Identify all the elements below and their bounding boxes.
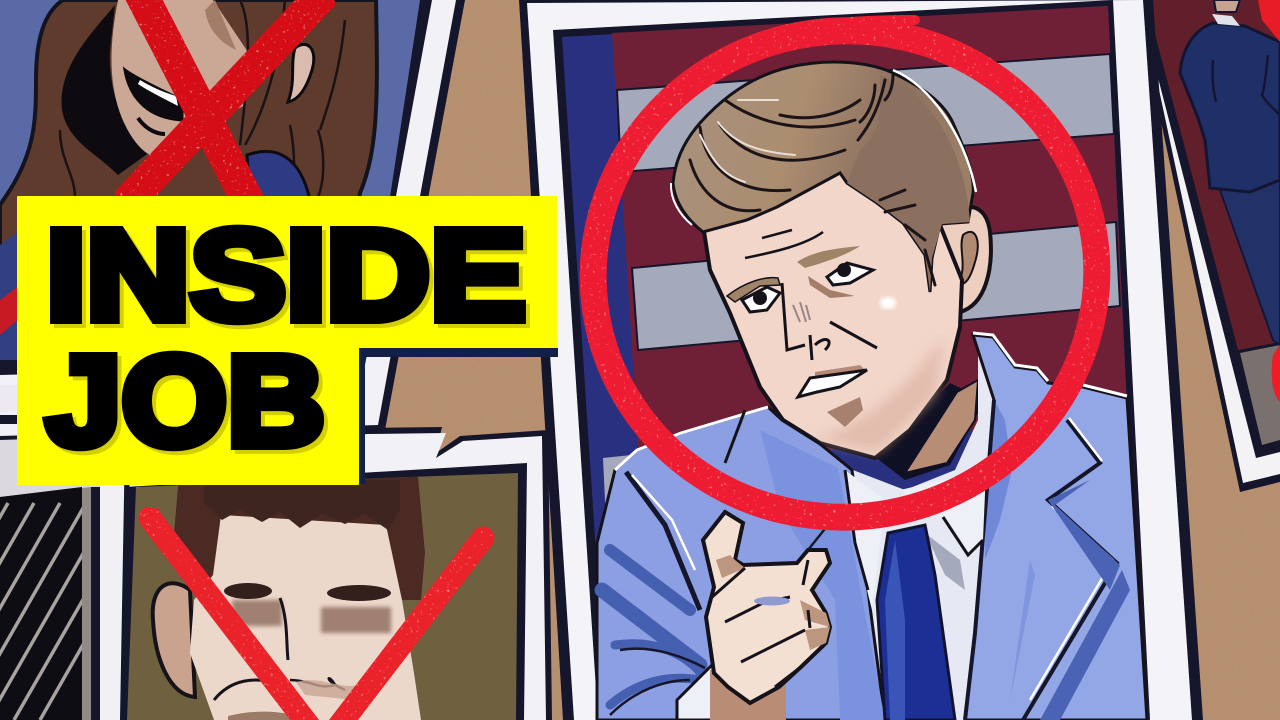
panel: kennedy photo (519, 0, 1203, 720)
eyes (742, 263, 873, 312)
title line 1 shadow: INSIDE (50, 208, 530, 351)
hair (174, 476, 425, 600)
lower left fragment: white band (0, 385, 20, 412)
red circle (562, 0, 1128, 550)
suit: right side (965, 335, 1147, 720)
panel: right photo navy suit (1135, 0, 1280, 492)
lower left fragment: red band (0, 288, 17, 335)
hair strands light (700, 100, 795, 182)
figure: trousers (1220, 175, 1280, 345)
lower left fragment: navy (0, 232, 17, 300)
flag: grey bottom stripe (603, 452, 660, 520)
grey floor (1240, 345, 1280, 445)
ear (288, 44, 314, 102)
hair white outline (893, 70, 976, 192)
blue backdrop (0, 0, 420, 202)
figure: collar (1212, 14, 1240, 26)
suit: lapel shade (1048, 480, 1120, 590)
forearm (710, 660, 786, 720)
panel: man photo with red cross (120, 427, 552, 720)
suit: lapel lines (626, 410, 832, 610)
mouth (798, 370, 867, 397)
mouth (228, 712, 290, 720)
chin shade (827, 397, 863, 427)
suit: inner shade (985, 400, 1012, 560)
nose (214, 598, 345, 700)
hair strands dark (690, 75, 935, 285)
flag: grey lower stripe (632, 222, 1120, 350)
suit: lapel (1023, 420, 1117, 720)
shirt shadow (925, 533, 965, 590)
black hair streaks (62, 5, 150, 175)
flag: maroon (612, 6, 1127, 475)
title line 2 shadow: JOB (50, 334, 329, 477)
tie (877, 525, 955, 720)
teeth (138, 80, 178, 106)
face (703, 150, 962, 458)
face (190, 515, 421, 720)
frame outer line (519, 0, 1203, 720)
face (112, 0, 250, 155)
jagged fringe (204, 480, 400, 530)
red x (125, 0, 325, 205)
title line 1: INSIDE (46, 204, 526, 347)
yellow box (18, 197, 556, 484)
flag: grey top stripe (617, 54, 1114, 172)
figure: jacket (1180, 23, 1280, 192)
finger lines (711, 560, 810, 687)
frame white (527, 0, 1192, 720)
suit: collar white line (973, 333, 1127, 396)
brows (224, 583, 391, 601)
blue top (247, 151, 310, 200)
jaw shade (800, 335, 945, 452)
cheek highlights (880, 297, 896, 309)
hand pointing (703, 512, 830, 703)
figure: neck (1214, 0, 1240, 12)
neck: dark shadow (875, 383, 985, 480)
hair dark side (847, 75, 970, 292)
red cross (150, 518, 483, 720)
shirt (840, 340, 1000, 720)
upper lip (815, 365, 865, 382)
nose (782, 283, 877, 360)
ear (153, 583, 195, 697)
suit: center band (760, 430, 885, 720)
brows (797, 246, 860, 268)
red marks (1258, 0, 1280, 42)
nose shadow (296, 680, 358, 700)
title line 2: JOB (46, 330, 325, 473)
hand shadows (716, 555, 830, 650)
panel: lower left striped photo (0, 436, 130, 720)
cuff (677, 663, 725, 720)
flag: canton (562, 6, 1142, 720)
suit: shoulder white line (615, 407, 768, 470)
shirt divider line (965, 400, 994, 720)
title box: inside job (18, 197, 558, 484)
hair (0, 0, 377, 370)
maroon backdrop (1146, 0, 1280, 350)
photo inner line (553, 0, 1150, 720)
box shadow (358, 348, 558, 484)
hair (673, 62, 973, 292)
brown under-eye bands (232, 600, 391, 633)
eye shade (808, 276, 855, 298)
suit: sleeve folds (602, 550, 700, 705)
hair strands (60, 0, 345, 197)
panel: woman photo crossed out (0, 0, 465, 442)
nose hatch (793, 302, 810, 322)
shirt front right (935, 533, 983, 720)
mouth (125, 70, 182, 120)
eye shadow (205, 0, 236, 50)
neck: brown (905, 380, 978, 473)
forehead lines (745, 230, 823, 258)
ear (940, 207, 991, 312)
collar left (845, 470, 885, 610)
suit: left side (597, 407, 885, 720)
finger nail (754, 596, 790, 606)
collar right (900, 470, 986, 555)
